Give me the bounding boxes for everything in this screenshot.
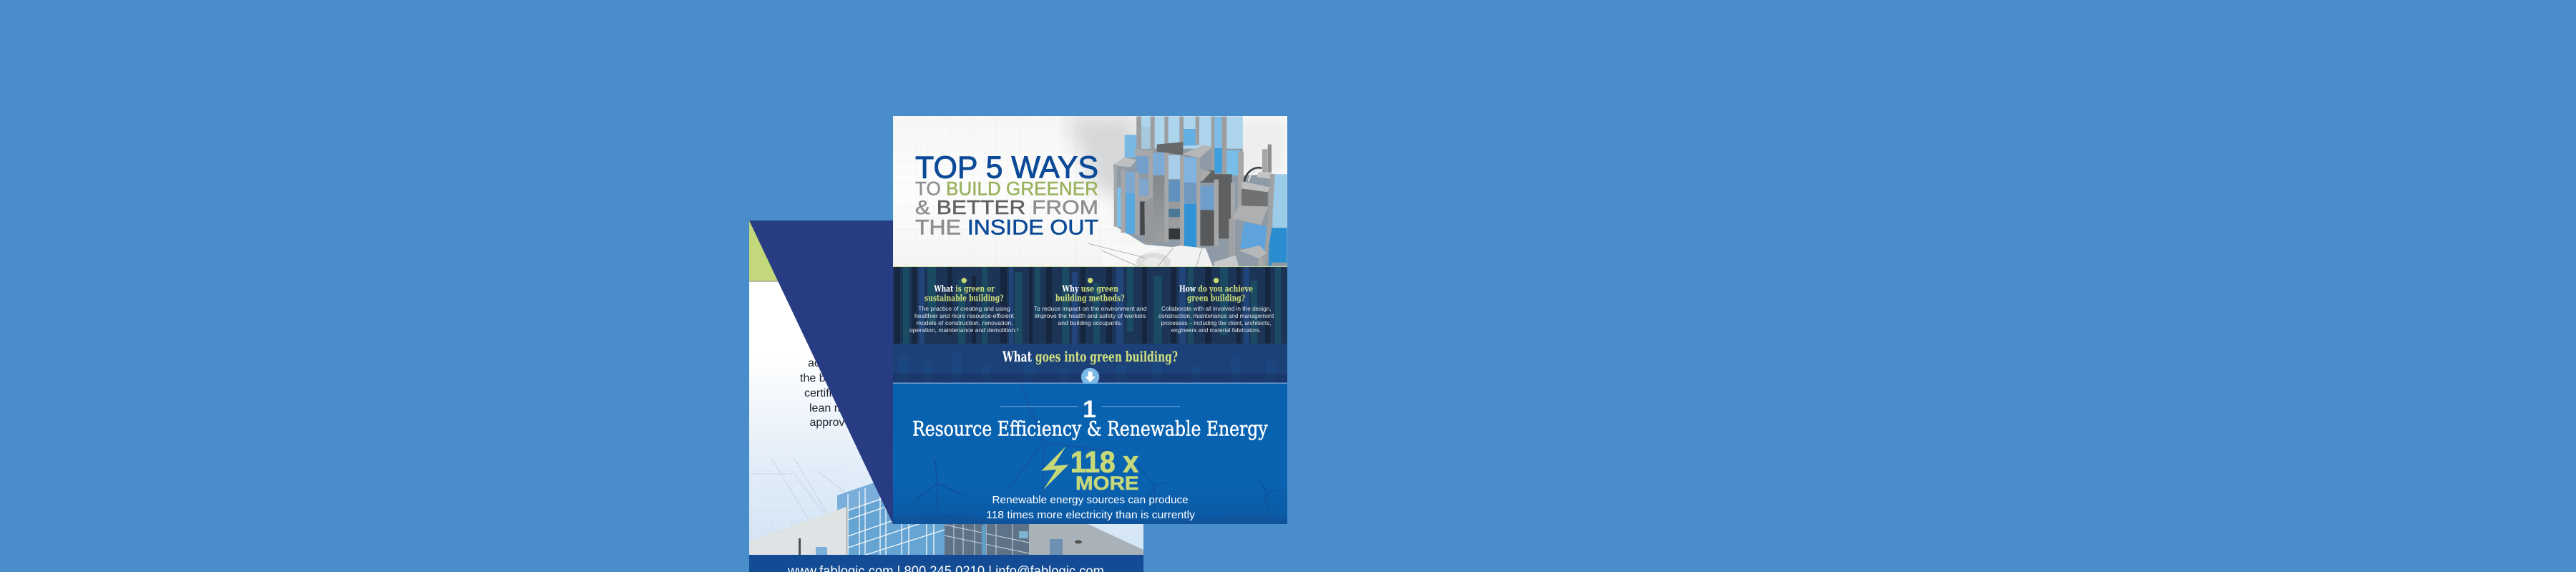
panel: what goes into green building [893,344,1287,386]
brochure paper [749,282,1143,550]
panel: hero [893,116,1287,271]
statistic: 118 x [1070,445,1139,478]
column body: construction, maintenance and management [1158,312,1274,319]
statistic: MORE [1075,472,1139,494]
title [915,156,1098,235]
hero bottom rule [893,266,1287,268]
statistic description: 118 times more electricity than is currently [986,509,1196,521]
section heading: Resource Efficiency & Renewable Energy [912,417,1268,440]
column heading: Why use green [1062,284,1118,294]
number rule right [1102,406,1180,407]
brochure body text fragments: ac [808,357,820,369]
statistic description: Renewable energy sources can produce [992,494,1189,506]
column heading: green building? [1187,294,1245,304]
bullet dot [962,278,967,283]
blueprint fade at foot of building [1088,243,1212,266]
column body: improve the health and safety of workers [1035,312,1146,319]
green header band [749,220,779,282]
icon: lightning bolt [1041,446,1069,490]
column body: and building occupants. [1058,319,1122,326]
column heading: sustainable building? [924,294,1003,304]
hero backdrop [893,116,1287,267]
title line 3: & BETTER FROM [915,196,1098,218]
column body [1034,305,1147,326]
icon: down arrow [1081,368,1099,386]
panel: back brochure [749,220,1143,572]
column heading: How do you achieve [1179,284,1253,294]
bullet dot [1214,278,1219,283]
striped dark backdrop [893,267,1287,344]
column: why use green building [1034,278,1147,326]
title line 1: TOP 5 WAYS [915,150,1098,185]
brochure body text fragments: the b [800,372,826,384]
column body: operation, maintenance and demolition.¹ [909,326,1019,334]
footer bar with contact details [749,555,1143,572]
brochure body text fragments: lean m [809,402,844,415]
column heading [1179,284,1253,304]
statistic [1070,445,1139,494]
title line 2: TO BUILD GREENER [915,178,1098,199]
blue backdrop [893,384,1287,524]
statistic description [986,494,1196,521]
illustration: building under construction [1113,117,1287,268]
brochure body text fragments: certifi [804,387,831,399]
brochure body text fragments [800,357,844,429]
title line 4: THE INSIDE OUT [915,216,1098,240]
column body: healthier and more resource-efficient [914,312,1015,319]
column body: processes – including the client, architects, [1161,319,1271,326]
blueprint sketch [751,458,846,520]
column body: The practice of creating and using [918,305,1010,312]
column body: To reduce impact on the environment and [1034,305,1147,312]
column heading [924,284,1003,304]
column heading: What is green or [934,284,995,294]
navy diagonal shape [749,220,893,524]
panel: green building questions [893,267,1287,344]
striped band [893,344,1287,383]
wind turbines and hills [893,387,1287,524]
column heading: building methods? [1055,294,1125,304]
column body [909,305,1019,334]
column body [1158,305,1274,334]
section number: 1 [1083,396,1096,423]
section question heading: What goes into green building? [1002,348,1178,365]
column: what is green building [909,278,1019,334]
panel: resource efficiency and renewable energy [893,384,1287,524]
column body: Collaborate with all involved in the design, [1161,305,1272,312]
section divider [893,382,1287,384]
photo: modern building [749,483,1143,555]
number rule left [1000,406,1078,407]
column: how to achieve green building [1158,278,1274,334]
column heading [1055,284,1125,304]
column body: models of construction, renovation, [917,319,1013,326]
brochure body text fragments: approv [810,417,844,429]
bullet dot [1088,278,1093,283]
column body: engineers and material fabricators. [1171,326,1261,334]
